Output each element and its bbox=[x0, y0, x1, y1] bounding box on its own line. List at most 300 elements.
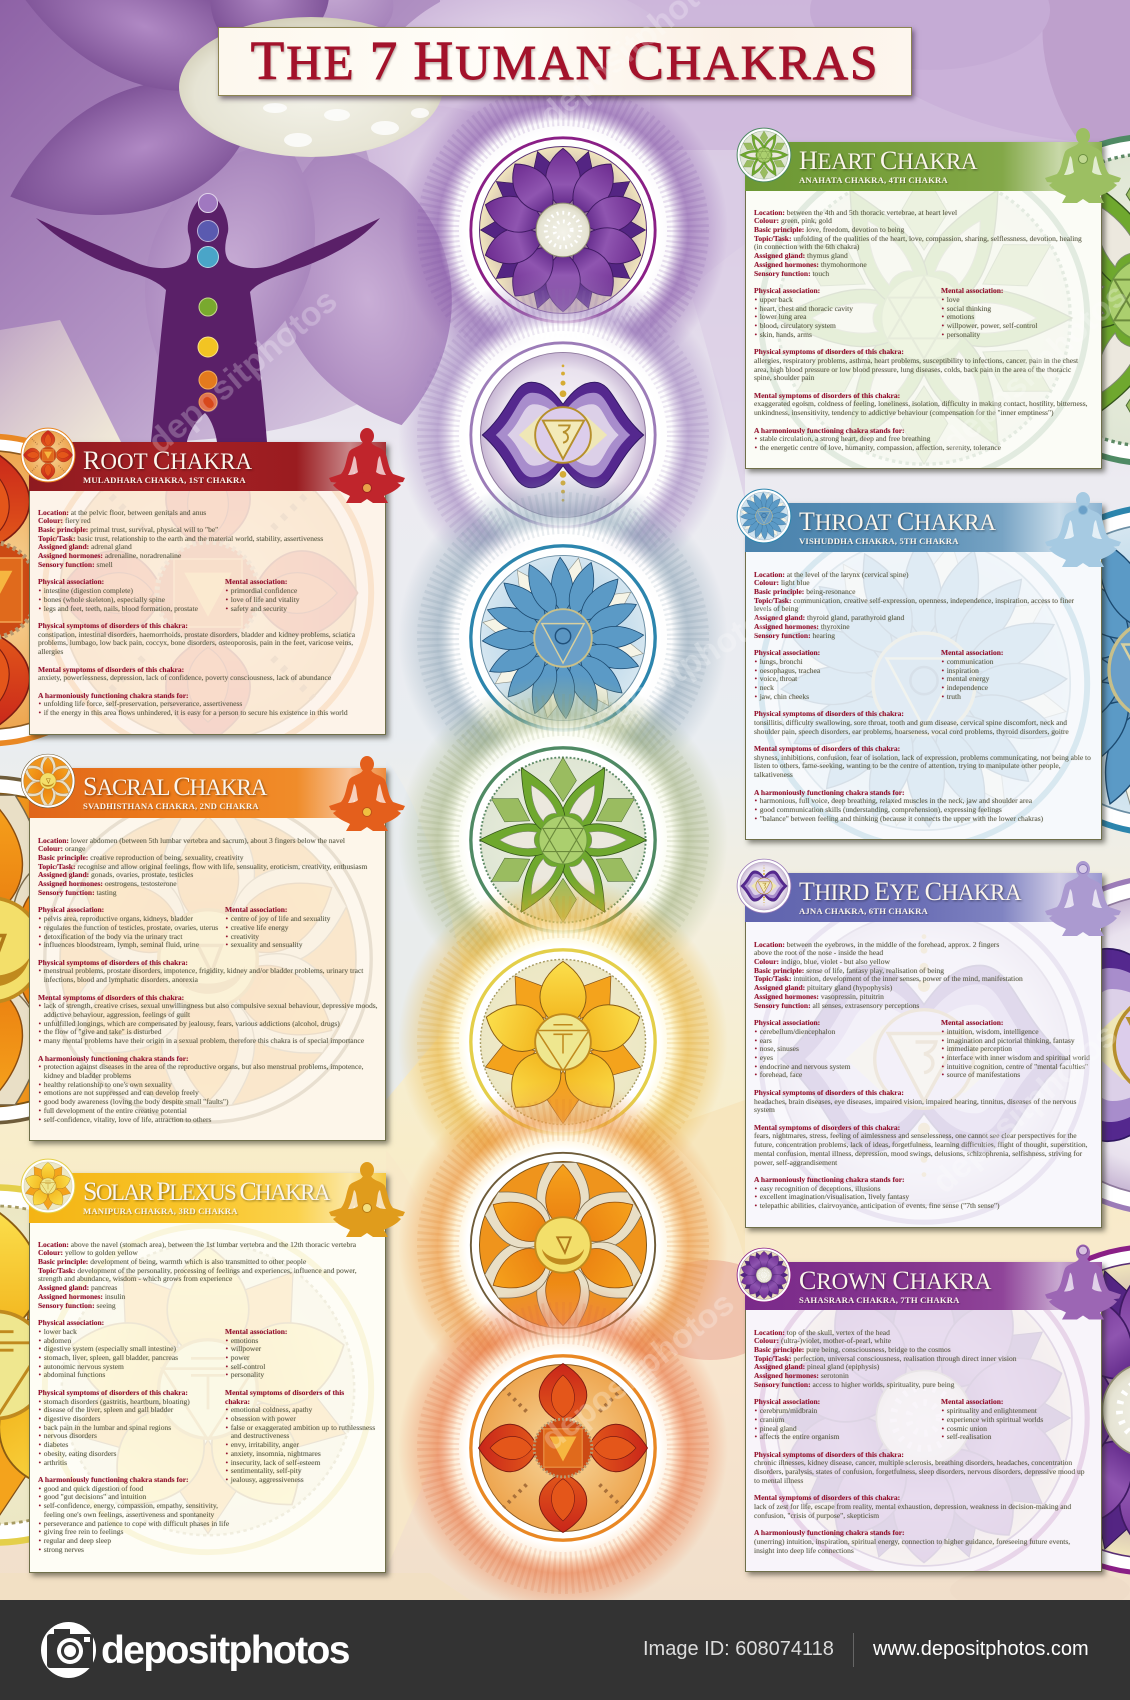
solar text: A harmoniously functioning chakra stands for: bbox=[38, 1475, 189, 1484]
crown text: lack of zest for life, escape from reality, mental exhaustion, depression, weakness in decision-making and bbox=[754, 1502, 1071, 1511]
sacral text: • bbox=[38, 940, 41, 949]
solar text: • bbox=[38, 1327, 41, 1336]
throat header bbox=[745, 503, 1102, 552]
sacral header bbox=[29, 768, 386, 818]
third eye text: Physical symptoms of disorders of this chakra: bbox=[754, 1088, 904, 1097]
sacral text: Physical association: bbox=[38, 905, 104, 914]
root text: Mental symptoms of disorders of this chakra: bbox=[38, 665, 184, 674]
sacral text: • bbox=[38, 1097, 41, 1106]
crown text: chronic illnesses, kidney disease, cancer, multiple sclerosis, breathing disorders, headaches, concentration bbox=[754, 1458, 1072, 1467]
heart text: the energetic centre of love, humanity, compassion, affection, serenity, tolerance bbox=[760, 443, 1001, 452]
throat text: • bbox=[942, 666, 944, 674]
heart text: • bbox=[754, 330, 757, 339]
third eye text: Physical association: bbox=[754, 1018, 820, 1027]
throat text: Sensory function: hearing bbox=[754, 631, 835, 640]
mandala: crown chakra bbox=[398, 65, 728, 395]
image id: Image ID: 608074118 bbox=[643, 1638, 834, 1660]
heart text: willpower, power, self-control bbox=[947, 321, 1038, 330]
solar text: • bbox=[38, 1397, 41, 1406]
solar text: • bbox=[38, 1501, 41, 1510]
solar header bbox=[29, 1173, 386, 1223]
title banner: THE 7 HUMAN CHAKRAS bbox=[251, 30, 879, 91]
throat text: harmonious, full voice, deep breathing, relaxed muscles in the neck, jaw and shoulder area bbox=[760, 796, 1032, 805]
root text: Basic principle: primal trust, survival, physical will to "be" bbox=[38, 525, 218, 534]
third eye text: endocrine and nervous system bbox=[760, 1062, 850, 1071]
sacral text: unfulfilled longings, which are compensated by jealousy, fears, various addictions (alcohol, drugs) bbox=[44, 1019, 340, 1028]
sacral text: creative life energy bbox=[231, 923, 289, 932]
sacral text: self-confidence, vitality, love of life, attraction to others bbox=[44, 1115, 211, 1124]
crown text: • bbox=[942, 1406, 944, 1415]
throat header: VISHUDDHA CHAKRA, 5TH CHAKRA bbox=[799, 536, 959, 546]
crown text: confusion, "crisis of purpose", skepticism bbox=[754, 1511, 879, 1520]
icon: sacral meditator bbox=[329, 756, 405, 831]
third eye text: Topic/Task: intuition, development of the inner senses, power of the mind, manifestation bbox=[754, 974, 1023, 983]
third eye text: Mental association: bbox=[941, 1018, 1003, 1027]
solar text: • bbox=[38, 1336, 41, 1344]
crown text: • bbox=[754, 1406, 757, 1415]
crown text: Sensory function: access to higher worlds, spirituality, pure being bbox=[754, 1380, 954, 1389]
third eye text: • bbox=[754, 1036, 757, 1044]
sacral text: Topic/Task: recognise and allow original feelings, flow with life, sensuality, eroticism, creativity, enthusiasm bbox=[38, 862, 367, 871]
solar text: abdomen bbox=[44, 1336, 71, 1344]
solar text: back pain in the lumbar and spinal regions bbox=[44, 1423, 171, 1432]
crown text: cerebrum/midbrain bbox=[760, 1406, 817, 1415]
sacral text: infections, blood and lymphatic disorders, anorexia bbox=[44, 975, 198, 984]
sacral text: Location: lower abdomen (between 5th lumbar vertebra and sacrum), about 3 fingers below the navel bbox=[38, 836, 345, 845]
sacral text: good body awareness (loving the body despite small "faults") bbox=[44, 1097, 228, 1106]
throat text: • bbox=[754, 666, 757, 674]
solar text: and destructiveness bbox=[231, 1431, 289, 1440]
heart text: social thinking bbox=[947, 304, 991, 312]
root text: Physical association: bbox=[38, 577, 104, 586]
root text: Topic/Task: basic trust, relationship to the earth and the material world, stability, assertiveness bbox=[38, 534, 323, 543]
icon: throat mandala bbox=[736, 488, 792, 544]
third eye text: A harmoniously functioning chakra stands for: bbox=[754, 1175, 905, 1184]
solar text: self-control bbox=[231, 1362, 265, 1371]
sacral text: healthy relationship to one's own sexuality bbox=[44, 1080, 172, 1089]
throat text bbox=[754, 570, 1091, 823]
solar text: obesity, eating disorders bbox=[44, 1449, 116, 1458]
sacral text: influences bloodstream, lymph, seminal fluid, urine bbox=[44, 940, 199, 949]
third eye text: Sensory function: all senses, extrasensory perceptions bbox=[754, 1001, 919, 1010]
third eye header: AJNA CHAKRA, 6TH CHAKRA bbox=[799, 906, 928, 916]
heart text: • bbox=[754, 443, 757, 452]
crown text: cosmic union bbox=[947, 1424, 987, 1432]
crown header: CROWN CHAKRA bbox=[799, 1266, 992, 1295]
sacral text: • bbox=[38, 966, 41, 975]
crown text: • bbox=[754, 1432, 757, 1441]
crown text: experience with spiritual worlds bbox=[947, 1415, 1043, 1424]
panel: third eye chakra bbox=[736, 858, 1121, 1235]
footer logo: depositphotos bbox=[101, 1629, 350, 1672]
crown text: • bbox=[942, 1432, 944, 1441]
root text: • bbox=[38, 699, 41, 708]
root text: Mental association: bbox=[225, 577, 287, 586]
throat text: tonsillitis, difficulty swallowing, sore throat, tooth and gum disease, cervical spine discomfort, neck and bbox=[754, 718, 1067, 727]
footer logo bbox=[41, 1622, 350, 1678]
root text: love of life and vitality bbox=[231, 595, 300, 604]
third eye text: telepathic abilities, clairvoyance, anticipation of events, fine sense ("7th sense") bbox=[760, 1201, 1000, 1210]
solar text: regular and deep sleep bbox=[44, 1536, 111, 1545]
throat text: shoulder pain, speech disorders, ear problems, hoarseness, vocal cord problems, thyroid disorders, goitre bbox=[754, 727, 1069, 736]
solar text: power bbox=[231, 1353, 249, 1362]
crown text: Assigned gland: pineal gland (epiphysis) bbox=[754, 1362, 879, 1371]
watermarks: depositphotos bbox=[141, 281, 345, 461]
throat text: • bbox=[754, 692, 757, 701]
heart header: HEART CHAKRA bbox=[799, 146, 977, 175]
icon: third eye mandala bbox=[736, 858, 792, 914]
third eye text: Colour: indigo, blue, violet - but also yellow bbox=[754, 957, 890, 966]
third eye text: easy recognition of deceptions, illusions bbox=[760, 1184, 881, 1193]
throat text: • bbox=[942, 657, 944, 666]
solar text: • bbox=[38, 1449, 41, 1458]
solar text: • bbox=[38, 1344, 41, 1353]
panel: heart chakra bbox=[736, 128, 1121, 476]
sacral text: protection against diseases in the area of the reproductive organs, but also menstrual problems, impotence, bbox=[44, 1062, 364, 1071]
heart text: Location: between the 4th and 5th thoracic vertebrae, at heart level bbox=[754, 208, 957, 217]
crown text: disorders, paralysis, states of confusion, forgetfulness, sleep disorders, nervous disorders, depressive mood up bbox=[754, 1467, 1084, 1476]
solar text: digestive system (especially small intestine) bbox=[44, 1344, 176, 1353]
solar text: Location: above the navel (stomach area), between the 1st lumbar vertebra and the 12th thoracic vertebra bbox=[38, 1240, 356, 1249]
third eye text: Mental symptoms of disorders of this chakra: bbox=[754, 1123, 900, 1132]
solar text: giving free rein to feelings bbox=[44, 1527, 123, 1536]
icon: solar meditator bbox=[329, 1162, 405, 1237]
third eye text: • bbox=[942, 1036, 944, 1044]
crown text: Topic/Task: perfection, universal consciousness, realisation through direct inner vision bbox=[754, 1354, 1016, 1363]
heart text: • bbox=[942, 330, 944, 339]
sacral text: emotions are not suppressed and can develop freely bbox=[44, 1088, 199, 1097]
throat text: • bbox=[754, 657, 757, 666]
solar text: • bbox=[226, 1344, 228, 1353]
root text: • bbox=[226, 595, 228, 604]
throat text: Physical symptoms of disorders of this chakra: bbox=[754, 709, 904, 718]
solar text: strong nerves bbox=[44, 1545, 84, 1554]
third eye text: cerebellum/diencephalon bbox=[760, 1027, 835, 1036]
throat text: voice, throat bbox=[760, 674, 797, 683]
third eye text: ears bbox=[760, 1036, 772, 1044]
panel: crown chakra bbox=[736, 1244, 1121, 1579]
solar text: disease of the liver, spleen and gall bladder bbox=[44, 1405, 173, 1414]
root text: allergies bbox=[38, 647, 63, 656]
throat text: jaw, chin cheeks bbox=[760, 692, 809, 701]
heart text: • bbox=[942, 312, 944, 321]
third eye text: eyes bbox=[760, 1053, 773, 1062]
sacral text: many mental problems have their origin in a sexual problem, therefore this chakra is of special importance bbox=[44, 1036, 364, 1045]
sacral text: Colour: orange bbox=[38, 844, 85, 853]
root text: intestine (digestion complete) bbox=[44, 586, 133, 595]
sacral text: • bbox=[226, 932, 228, 940]
third eye text: • bbox=[754, 1201, 757, 1210]
heart text: Physical association: bbox=[754, 286, 820, 295]
solar text: Sensory function: seeing bbox=[38, 1301, 116, 1310]
mandala: root chakra bbox=[398, 1283, 728, 1613]
solar text: Physical association: bbox=[38, 1318, 104, 1327]
solar text: chakra: bbox=[225, 1397, 250, 1406]
watermarks: depositphotos bbox=[925, 1016, 1124, 1201]
throat text: listen to others, fame-seeking, wanting to be the centre of attention, trying to manipulate other people, bbox=[754, 761, 1061, 770]
root text: safety and security bbox=[231, 604, 287, 612]
third eye text: excellent imagination/visualisation, lively fantasy bbox=[760, 1192, 909, 1201]
solar text: • bbox=[226, 1475, 228, 1484]
crown text bbox=[754, 1328, 1084, 1555]
third eye text bbox=[754, 940, 1090, 1210]
throat text: oesophagus, trachea bbox=[760, 666, 820, 674]
solar text: • bbox=[226, 1440, 228, 1449]
third eye text: headaches, brain diseases, eye diseases, impaired vision, impaired hearing, tinnitus, diseases of the nervous bbox=[754, 1097, 1076, 1106]
heart text: • bbox=[754, 321, 757, 330]
throat text: neck bbox=[760, 683, 774, 692]
solar text: strength and abundance, wisdom - which grows from experience bbox=[38, 1274, 232, 1283]
solar text: self-confidence, energy, compassion, empathy, sensitivity, bbox=[44, 1501, 218, 1510]
heart text: • bbox=[754, 434, 757, 443]
solar text: emotional coldness, apathy bbox=[231, 1405, 312, 1414]
solar text: • bbox=[38, 1519, 41, 1528]
sacral text: sexuality and sensuality bbox=[231, 940, 302, 949]
throat text: Topic/Task: communication, creative self-expression, openness, independence, inspiration, access to finer bbox=[754, 596, 1074, 605]
root text: Sensory function: smell bbox=[38, 560, 113, 569]
sacral text: kidney and bladder problems bbox=[44, 1071, 131, 1080]
sacral text: • bbox=[38, 1062, 41, 1071]
sacral text: • bbox=[226, 914, 228, 923]
sacral text: menstrual problems, prostate disorders, impotence, frigidity, kidney and/or bladder problems, urinary tract bbox=[44, 966, 363, 975]
third eye text: above the root of the nose - inside the head bbox=[754, 948, 883, 957]
sacral text: creativity bbox=[231, 932, 259, 940]
solar text: Physical symptoms of disorders of this chakra: bbox=[38, 1388, 188, 1397]
icon: heart mandala bbox=[736, 128, 792, 182]
root text: problems, lumbago, low back pain, coccyx, bone disorders, osteoporosis, pain in the feet, varicose veins, bbox=[38, 638, 353, 647]
third eye text: • bbox=[754, 1027, 757, 1036]
watermarks: depositphotos bbox=[534, 1284, 741, 1458]
sacral text: Assigned gland: gonads, ovaries, prostate, testicles bbox=[38, 870, 193, 879]
solar text: • bbox=[226, 1370, 228, 1379]
throat text: levels of being bbox=[754, 604, 798, 613]
throat text: • bbox=[942, 692, 944, 701]
third eye text: • bbox=[754, 1184, 757, 1193]
throat text: lungs, bronchi bbox=[760, 657, 803, 666]
third eye text: imagination and pictorial thinking, fantasy bbox=[947, 1036, 1075, 1044]
root text: • bbox=[226, 604, 228, 612]
root text: unfolding life force, self-preservation, perseverance, assertiveness bbox=[44, 699, 242, 708]
icon: sacral mandala bbox=[20, 754, 76, 808]
root text: bones (whole skeleton), especially spine bbox=[44, 595, 165, 604]
crown text: Assigned hormones: serotonin bbox=[754, 1371, 849, 1380]
solar text: perseverance and patience to cope with difficult phases in life bbox=[44, 1519, 229, 1528]
crown text: A harmoniously functioning chakra stands for: bbox=[754, 1528, 905, 1537]
panel: root chakra bbox=[20, 428, 405, 742]
solar text bbox=[38, 1240, 376, 1554]
third eye text: interface with inner wisdom and spiritual world bbox=[947, 1053, 1090, 1062]
root text: Location: at the pelvic floor, between genitals and anus bbox=[38, 508, 206, 517]
heart text: exaggerated egoism, coldness of feeling, loneliness, isolation, difficulty in making contact, hostility, bitterness, bbox=[754, 399, 1088, 408]
icon: crown mandala bbox=[736, 1248, 792, 1302]
throat text: • bbox=[754, 674, 757, 683]
heart text: • bbox=[754, 312, 757, 321]
sacral text: • bbox=[38, 914, 41, 923]
third eye text: immediate perception bbox=[947, 1044, 1012, 1053]
throat text: "balance" between feeling and thinking (because it connects the upper with the lower chakras) bbox=[760, 814, 1043, 823]
third eye text: power, self-aggrandisement bbox=[754, 1158, 837, 1167]
crown text: Colour: (ultra-)violet, mother-of-pearl, white bbox=[754, 1336, 891, 1345]
heart text: Colour: green, pink, gold bbox=[754, 216, 832, 225]
third eye text: Basic principle: sense of life, fantasy play, realisation of being bbox=[754, 966, 944, 975]
third eye text: • bbox=[942, 1070, 944, 1079]
throat text: Assigned hormones: thyroxine bbox=[754, 622, 850, 631]
solar text: • bbox=[38, 1431, 41, 1440]
footer bar bbox=[0, 1600, 1130, 1700]
solar text: willpower bbox=[231, 1344, 261, 1353]
solar header: MANIPURA CHAKRA, 3RD CHAKRA bbox=[83, 1206, 238, 1216]
solar text: • bbox=[226, 1423, 228, 1432]
panel: sacral chakra bbox=[20, 754, 405, 1148]
heart text: heart, chest and thoracic cavity bbox=[760, 304, 853, 312]
solar text: Mental symptoms of disorders of this bbox=[225, 1388, 344, 1397]
solar text: • bbox=[38, 1440, 41, 1449]
crown header bbox=[745, 1262, 1102, 1310]
solar text: • bbox=[38, 1484, 41, 1493]
sacral text bbox=[38, 836, 378, 1124]
sacral text: • bbox=[38, 1001, 41, 1010]
watermarks: depositphotos bbox=[569, 592, 788, 749]
root text: • bbox=[38, 708, 41, 717]
root text: • bbox=[38, 595, 41, 604]
crown text: spirituality and enlightenment bbox=[947, 1406, 1037, 1415]
solar text: stomach disorders (gastritis, heartburn, bloating) bbox=[44, 1397, 190, 1406]
heart text bbox=[754, 208, 1088, 452]
figure chakra dots bbox=[198, 194, 218, 411]
root header: ROOT CHAKRA bbox=[83, 446, 252, 475]
solar text: • bbox=[226, 1353, 228, 1362]
third eye text: Assigned hormones: vasopressin, pituitrin bbox=[754, 992, 884, 1001]
solar text: • bbox=[226, 1405, 228, 1414]
root text: A harmoniously functioning chakra stands for: bbox=[38, 691, 189, 700]
throat text: shyness, inhibitions, confusion, fear of isolation, lack of expression, problems communicating, not being able to bbox=[754, 753, 1091, 762]
solar text: • bbox=[226, 1466, 228, 1475]
crown text: to mental illness bbox=[754, 1476, 803, 1485]
heart text: Basic principle: love, freedom, devotion to being bbox=[754, 225, 904, 234]
sacral text: Assigned hormones: oestrogens, testosterone bbox=[38, 879, 177, 888]
root text: Physical symptoms of disorders of this chakra: bbox=[38, 621, 188, 630]
heart text: • bbox=[942, 295, 944, 304]
throat text: A harmoniously functioning chakra stands for: bbox=[754, 788, 905, 797]
sacral text: • bbox=[38, 932, 41, 940]
sacral text: • bbox=[38, 1106, 41, 1115]
panel: solar plexus chakra bbox=[20, 1158, 405, 1580]
crown text: Mental symptoms of disorders of this chakra: bbox=[754, 1493, 900, 1502]
throat text: inspiration bbox=[947, 666, 979, 674]
heart text: Mental symptoms of disorders of this chakra: bbox=[754, 391, 900, 400]
solar text: • bbox=[38, 1545, 41, 1554]
sacral text: lack of strength, creative crises, sexual unwillingness but also compulsive sexual behaviour, depressive moods, bbox=[44, 1001, 378, 1010]
solar text: • bbox=[226, 1458, 228, 1467]
sacral text: Mental symptoms of disorders of this chakra: bbox=[38, 993, 184, 1002]
third eye text: nose, sinuses bbox=[760, 1044, 799, 1053]
solar text: • bbox=[38, 1405, 41, 1414]
icon: crown meditator bbox=[1045, 1244, 1121, 1320]
throat text: good communication skills (understanding, comprehension), expressing feelings bbox=[760, 805, 1002, 814]
heart text: (in connection with the 6th chakra) bbox=[754, 242, 859, 251]
solar text: diabetes bbox=[44, 1440, 68, 1449]
crown text: Physical association: bbox=[754, 1397, 820, 1406]
icon: root meditator bbox=[329, 428, 405, 503]
root text: constipation, intestinal disorders, haemorrhoids, prostate disorders, bladder and kidney problems, sciatica bbox=[38, 630, 355, 639]
solar text: abdominal functions bbox=[44, 1370, 105, 1379]
solar text: arthritis bbox=[44, 1458, 67, 1467]
heart text: Topic/Task: unfolding of the qualities of the heart, love, compassion, sharing, selflessness, devotion, healing bbox=[754, 234, 1082, 243]
heart text: spine, shoulder pain bbox=[754, 373, 814, 382]
crown text: self-realisation bbox=[947, 1432, 991, 1441]
heart header bbox=[745, 142, 1102, 191]
root text: • bbox=[38, 586, 41, 595]
solar text: Assigned hormones: insulin bbox=[38, 1292, 125, 1301]
mandala: heart chakra bbox=[398, 675, 728, 1005]
crown text: cranium bbox=[760, 1415, 784, 1424]
solar text: false or exaggerated ambition up to ruthlessness bbox=[231, 1423, 375, 1432]
crown text: • bbox=[754, 1424, 757, 1432]
heart text: lower lung area bbox=[760, 312, 806, 321]
throat text: Assigned gland: thyroid gland, parathyroid gland bbox=[754, 613, 904, 622]
root text: • bbox=[38, 604, 41, 612]
throat text: • bbox=[754, 683, 757, 692]
throat header: THROAT CHAKRA bbox=[799, 507, 996, 536]
solar text: lower back bbox=[44, 1327, 77, 1336]
sacral text: regulates the function of testicles, prostate, ovaries, uterus bbox=[44, 923, 218, 932]
crown text: insight into deep life connections bbox=[754, 1546, 854, 1555]
third eye text: • bbox=[754, 1070, 757, 1079]
heart text: personality bbox=[947, 330, 980, 339]
icon: root mandala bbox=[20, 428, 76, 482]
heart text: allergies, respiratory problems, asthma, heart problems, susceptibility to infections, cancer, pain in the chest bbox=[754, 356, 1078, 365]
sacral text: • bbox=[38, 1115, 41, 1124]
heart text: Assigned hormones: thymohormone bbox=[754, 260, 867, 269]
solar text: • bbox=[38, 1492, 41, 1501]
human figure with chakra points bbox=[36, 194, 380, 442]
solar text: sentimentality, self-pity bbox=[231, 1466, 302, 1475]
crown text: Mental association: bbox=[941, 1397, 1003, 1406]
root text: if the energy in this area flows unhindered, it is easy for a person to secure his existence in this world bbox=[44, 708, 348, 717]
crown text: • bbox=[754, 1415, 757, 1424]
heart text: • bbox=[754, 304, 757, 312]
sacral text: Sensory function: tasting bbox=[38, 888, 117, 897]
third eye text: intuition, wisdom, intelligence bbox=[947, 1027, 1039, 1036]
heart text: • bbox=[754, 295, 757, 304]
heart text: • bbox=[942, 304, 944, 312]
heart text: love bbox=[947, 295, 960, 304]
crown text: Basic principle: pure being, consciousness, bridge to the cosmos bbox=[754, 1345, 951, 1354]
sacral text: • bbox=[38, 1080, 41, 1089]
throat text: • bbox=[754, 796, 757, 805]
throat text: independence bbox=[947, 683, 988, 692]
throat text: communication bbox=[947, 657, 993, 666]
heart text: Mental association: bbox=[941, 286, 1003, 295]
solar text: Assigned gland: pancreas bbox=[38, 1283, 117, 1292]
solar text: insecurity, lack of self-esteem bbox=[231, 1458, 320, 1467]
website url: www.depositphotos.com bbox=[873, 1638, 1089, 1660]
crown text: Location: top of the skull, vertex of the head bbox=[754, 1328, 890, 1337]
solar text: • bbox=[226, 1414, 228, 1423]
heart text: area, high blood pressure or low blood pressure, lung diseases, colds, back pain in the area of the thoracic bbox=[754, 365, 1071, 374]
throat text: • bbox=[754, 814, 757, 823]
solar text: envy, irritability, anger bbox=[231, 1440, 299, 1449]
mandala: sacral chakra bbox=[398, 1080, 728, 1410]
icon: throat meditator bbox=[1045, 492, 1121, 567]
solar text: jealousy, aggressiveness bbox=[231, 1475, 304, 1484]
throat text: • bbox=[942, 683, 944, 692]
root text: legs and feet, teeth, nails, blood formation, prostate bbox=[44, 604, 198, 612]
sacral text: A harmoniously functioning chakra stands for: bbox=[38, 1054, 189, 1063]
heart text: Sensory function: touch bbox=[754, 269, 829, 278]
solar text: emotions bbox=[231, 1336, 258, 1344]
throat text: talkativeness bbox=[754, 770, 793, 779]
